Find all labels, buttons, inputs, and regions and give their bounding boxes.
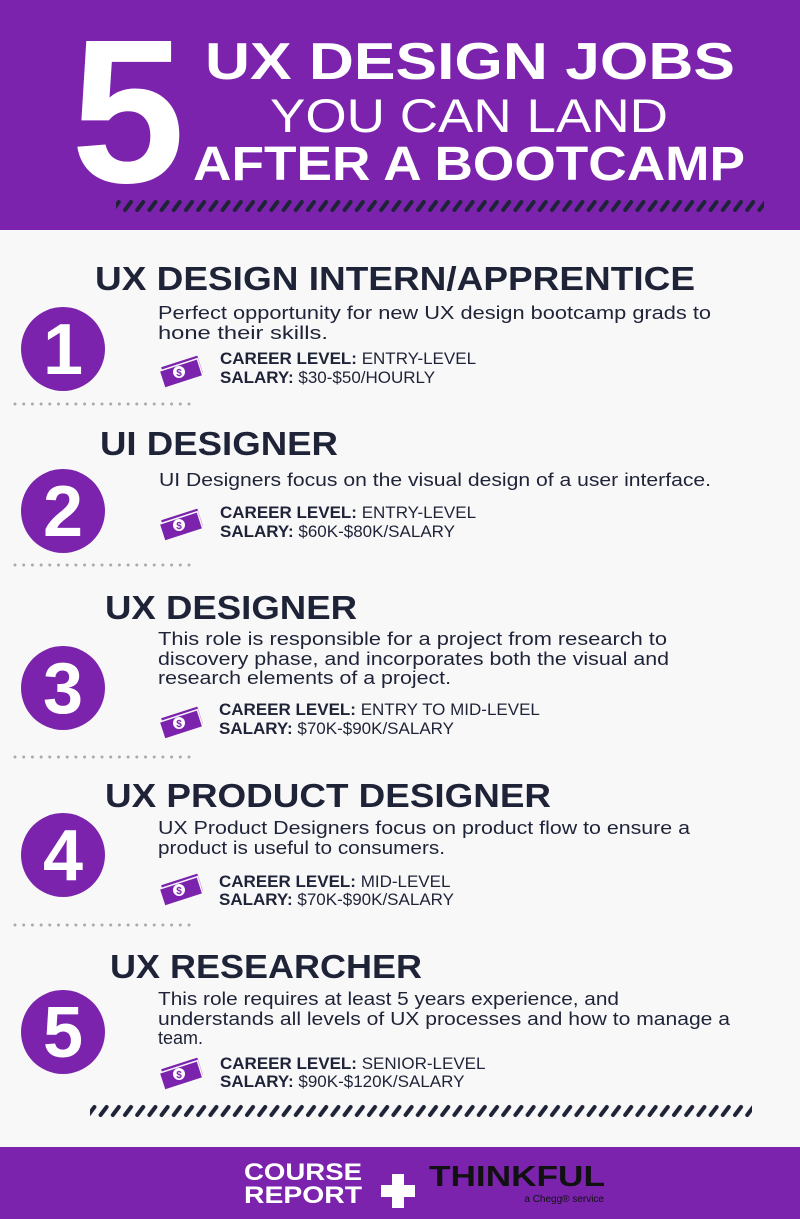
footer: REPORT — [244, 1182, 362, 1209]
footer — [0, 1147, 800, 1219]
job 5: team. — [158, 1028, 203, 1048]
job 1: hone their skills. — [158, 323, 328, 343]
title line 1: UX DESIGN JOBS — [205, 33, 735, 91]
job 2 — [15, 425, 711, 565]
job 3: 3 — [43, 649, 83, 729]
job 3 — [15, 589, 669, 757]
job 1: 1 — [43, 310, 83, 390]
job 5: CAREER LEVEL: SENIOR-LEVEL — [220, 1054, 485, 1073]
job 1: Perfect opportunity for new UX design bootcamp grads to — [158, 303, 711, 323]
job 1 — [15, 260, 711, 404]
job 2: UI Designers focus on the visual design of a user interface. — [159, 470, 711, 490]
job 4: 4 — [43, 816, 83, 896]
job 4: CAREER LEVEL: MID-LEVEL — [219, 872, 450, 891]
title line 3: AFTER A BOOTCAMP — [193, 138, 745, 191]
job 1: CAREER LEVEL: ENTRY-LEVEL — [220, 349, 476, 368]
job 3: UX DESIGNER — [105, 589, 357, 626]
job 4: UX PRODUCT DESIGNER — [105, 777, 551, 814]
job 5: SALARY: $90K-$120K/SALARY — [220, 1072, 464, 1091]
job 2: CAREER LEVEL: ENTRY-LEVEL — [220, 503, 476, 522]
job 3: research elements of a project. — [158, 668, 451, 688]
header — [0, 0, 800, 230]
logo: thinkful: THINKFUL — [429, 1161, 605, 1193]
logo: course report: COURSE — [244, 1159, 362, 1186]
job 5: understands all levels of UX processes and how to manage a — [158, 1009, 731, 1029]
footer: a Chegg® service — [524, 1194, 604, 1205]
job 3: CAREER LEVEL: ENTRY TO MID-LEVEL — [219, 700, 540, 719]
job 5 — [21, 948, 752, 1118]
plus — [381, 1174, 415, 1208]
job 5: 5 — [43, 993, 83, 1073]
job 4: product is useful to consumers. — [158, 838, 445, 858]
job 1: UX DESIGN INTERN/APPRENTICE — [95, 260, 695, 297]
job 4: UX Product Designers focus on product flow to ensure a — [158, 818, 691, 838]
big number 5: 5 — [71, 0, 185, 226]
job 3: SALARY: $70K-$90K/SALARY — [219, 719, 454, 738]
job 2: SALARY: $60K-$80K/SALARY — [220, 522, 455, 541]
job 3: discovery phase, and incorporates both the visual and — [158, 649, 669, 669]
job 4 — [15, 777, 691, 925]
job 5: This role requires at least 5 years experience, and — [158, 989, 619, 1009]
job 5: UX RESEARCHER — [110, 948, 422, 985]
job 1: SALARY: $30-$50/HOURLY — [220, 368, 435, 387]
job 4: SALARY: $70K-$90K/SALARY — [219, 890, 454, 909]
job 2: UI DESIGNER — [100, 425, 338, 462]
job 2: 2 — [43, 472, 83, 552]
title line 2: YOU CAN LAND — [270, 89, 668, 142]
job 3: This role is responsible for a project from research to — [158, 629, 667, 649]
